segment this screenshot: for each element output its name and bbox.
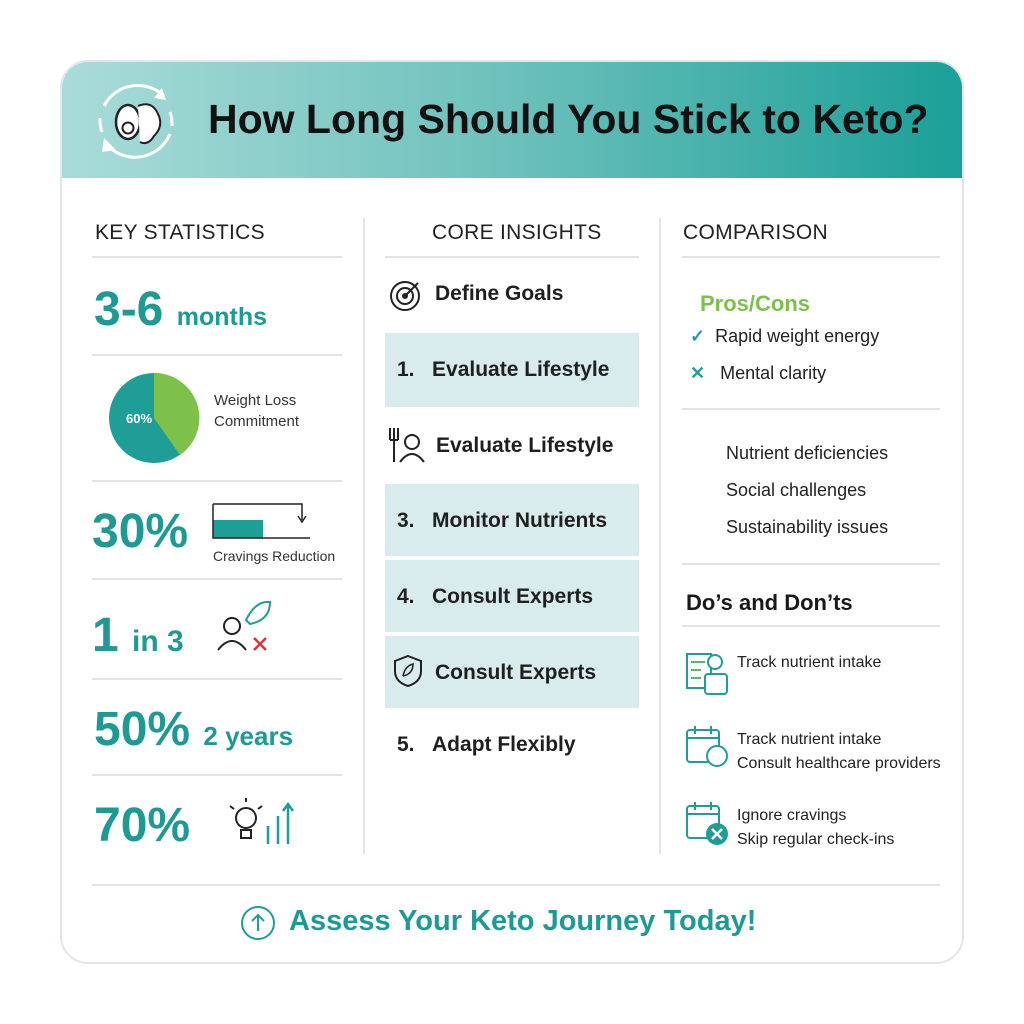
heading: KEY STATISTICS [95, 221, 265, 244]
insight box 4 [385, 560, 639, 632]
insight: evaluate lifestyle icon: Evaluate Lifestyle [436, 434, 613, 457]
title: How Long Should You Stick to Keto? [208, 96, 928, 142]
cons list [726, 443, 888, 537]
icon: bulb growth [230, 798, 294, 844]
stat 30%: 30% [92, 505, 188, 558]
pie label: Weight Loss [214, 392, 296, 409]
icon: person leaf x [217, 600, 271, 651]
heading: COMPARISON [683, 221, 828, 244]
stat 70%: 70% [94, 799, 190, 852]
cons list: Sustainability issues [726, 517, 888, 537]
pros/cons: Pros/Cons [700, 291, 810, 316]
panel: key statistics [92, 221, 342, 852]
insight box 1: 1. Evaluate Lifestyle [397, 358, 609, 381]
bar [212, 503, 310, 539]
do item 2: Consult healthcare providers [737, 755, 941, 772]
insight box shield: Consult Experts [435, 661, 596, 684]
insight box 3 [385, 484, 639, 556]
insight: define goals [390, 281, 563, 311]
cons list: Nutrient deficiencies [726, 443, 888, 463]
header [62, 62, 966, 178]
insight: evaluate lifestyle icon [389, 428, 613, 463]
card [60, 60, 964, 964]
panel: comparison [682, 221, 941, 848]
do item 2 [686, 726, 941, 772]
do item 1 [686, 653, 881, 695]
pie chart [109, 373, 200, 463]
pie label [214, 392, 299, 430]
dont item: Ignore cravings [737, 807, 846, 824]
cons list: Social challenges [726, 480, 866, 500]
pie label: Commitment [214, 413, 299, 430]
pie chart: 60% [126, 411, 152, 426]
icon: avocado brain cycle [98, 84, 174, 159]
do item 1: Track nutrient intake [737, 654, 881, 671]
insight 5: 5. Adapt Flexibly [397, 733, 576, 756]
stat 1 in 3: 1 in 3 [92, 609, 184, 662]
insight box 4: 4. Consult Experts [397, 585, 593, 608]
footer call to action: Assess Your Keto Journey Today! [289, 905, 756, 937]
panel: comparison: ✕ Mental clarity [690, 363, 826, 383]
dont item: Skip regular check-ins [737, 831, 894, 848]
dos and donts heading: Do’s and Don’ts [686, 590, 853, 615]
panel: key statistics: Cravings Reduction [213, 548, 335, 564]
stat 3-6 months: 3-6 months [94, 283, 267, 336]
dont item [686, 802, 894, 848]
insight box 1 [385, 333, 639, 407]
stat 50% 2 years: 50% 2 years [94, 703, 293, 756]
do item 2: Track nutrient intake [737, 731, 881, 748]
insight: define goals: Define Goals [435, 282, 563, 305]
insight box shield [385, 636, 639, 708]
insight box 3: 3. Monitor Nutrients [397, 509, 607, 532]
panel: comparison: ✓ Rapid weight energy [690, 326, 879, 346]
heading: CORE INSIGHTS [432, 221, 602, 244]
